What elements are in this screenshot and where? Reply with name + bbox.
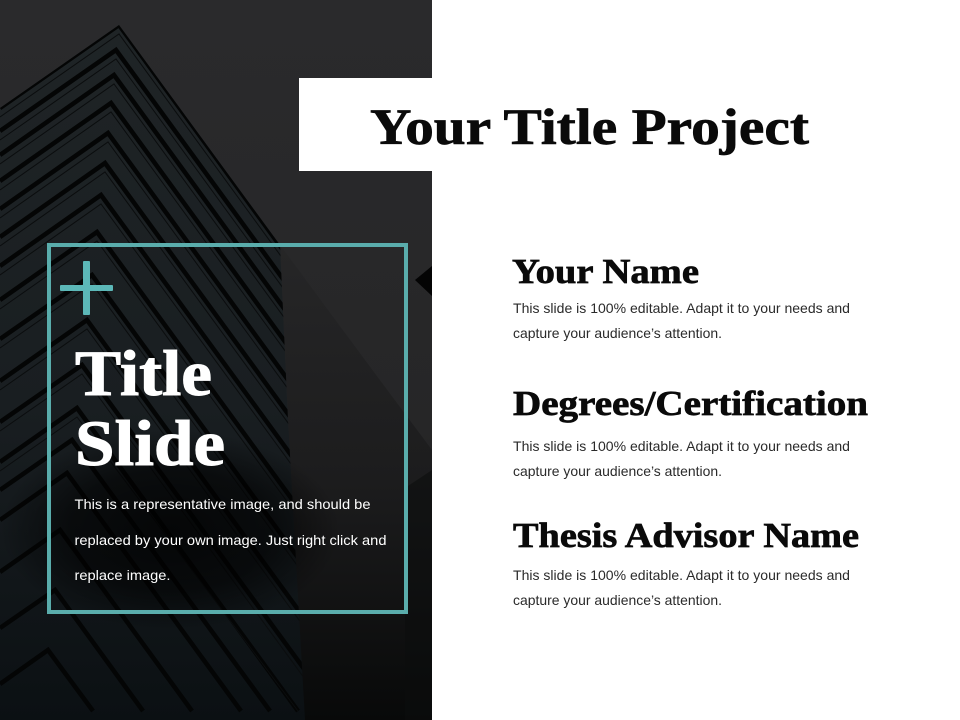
text block: thesis advisor description: capture your audience’s attention.: [513, 593, 722, 608]
text block: thesis advisor description: [513, 568, 850, 608]
section: your name: [512, 252, 850, 341]
text block: image note: replaced by your own image. Just right click and: [74, 532, 386, 548]
text block: degrees description: This slide is 100% editable. Adapt it to your needs and: [513, 439, 850, 454]
heading: your name: Your Name: [512, 252, 699, 291]
section: degrees: [513, 384, 868, 479]
heading: title slide: Slide: [75, 408, 225, 480]
text block: your name description: [513, 301, 850, 341]
panel: title slide frame: [49, 245, 406, 612]
icon: plus: [60, 261, 113, 315]
text block: image note: This is a representative image, and should be: [74, 496, 371, 512]
heading: degrees/certification: Degrees/Certification: [513, 384, 868, 423]
text block: degrees description: capture your audience’s attention.: [513, 464, 722, 479]
title text: Your Title Project: [370, 100, 809, 156]
heading: title slide: Title: [75, 338, 212, 410]
section: thesis advisor: [513, 516, 859, 608]
text block: image note: [74, 496, 386, 583]
text block: thesis advisor description: This slide is 100% editable. Adapt it to your needs and: [513, 568, 850, 583]
text block: image note: replace image.: [74, 567, 170, 583]
title banner: [299, 78, 809, 171]
heading: title slide: [75, 338, 225, 480]
text block: your name description: capture your audience’s attention.: [513, 326, 722, 341]
heading: thesis advisor name: Thesis Advisor Name: [513, 516, 859, 555]
background photo: dark building: [0, 0, 432, 720]
text block: your name description: This slide is 100% editable. Adapt it to your needs and: [513, 301, 850, 316]
text block: degrees description: [513, 439, 850, 479]
